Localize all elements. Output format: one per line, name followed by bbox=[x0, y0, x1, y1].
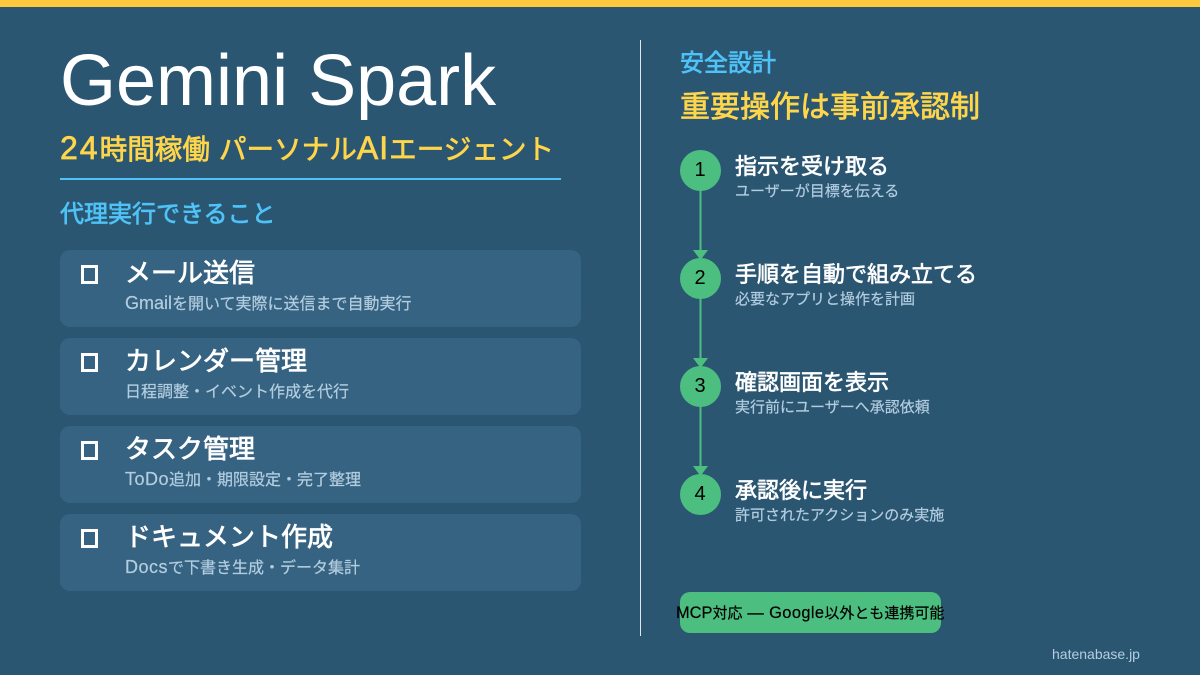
panel: tasks bbox=[60, 426, 581, 503]
icon: email bbox=[81, 265, 98, 284]
tasks heading: タスク管理 bbox=[125, 429, 255, 466]
section heading: prior approval: 重要操作は事前承認制 bbox=[680, 82, 980, 126]
icon: documents bbox=[81, 529, 98, 548]
step 3 number: 3 bbox=[694, 375, 706, 397]
panel: email bbox=[60, 250, 581, 327]
step 4 heading: 承認後に実行 bbox=[735, 473, 867, 505]
step 1 number: 1 bbox=[694, 159, 706, 181]
documents description: Docsで下書き生成・データ集計 bbox=[125, 554, 360, 578]
section label: safety design: 安全設計 bbox=[680, 43, 776, 78]
arrow: step 2 to 3 bbox=[693, 298, 708, 368]
step 1 heading: 指示を受け取る bbox=[735, 149, 889, 181]
MCP badge text: MCP対応 — Google以外とも連携可能 bbox=[676, 602, 944, 623]
icon: tasks bbox=[81, 441, 98, 460]
step 1 number bbox=[680, 150, 721, 191]
email description: Gmailを開いて実際に送信まで自動実行 bbox=[125, 290, 412, 314]
MCP badge bbox=[680, 592, 941, 633]
section heading: delegated tasks: 代理実行できること bbox=[60, 194, 276, 229]
step 3 heading: 確認画面を表示 bbox=[735, 365, 889, 397]
top accent bar bbox=[0, 0, 1200, 7]
step 4 description: 許可されたアクションのみ実施 bbox=[735, 504, 944, 525]
arrows between steps bbox=[693, 190, 708, 474]
documents heading: ドキュメント作成 bbox=[125, 517, 333, 554]
step 4 number bbox=[680, 474, 721, 515]
step 2 description: 必要なアプリと操作を計画 bbox=[735, 288, 915, 309]
subtitle: 24時間稼働 パーソナルAIエージェント bbox=[60, 127, 554, 167]
subtitle underline bbox=[60, 178, 561, 180]
tasks description: ToDo追加・期限設定・完了整理 bbox=[125, 466, 361, 490]
panel: calendar bbox=[60, 338, 581, 415]
arrow: step 1 to 2 bbox=[693, 190, 708, 260]
footer source: hatenabase.jp bbox=[1052, 646, 1140, 662]
step 2 number bbox=[680, 258, 721, 299]
panel: documents bbox=[60, 514, 581, 591]
step 4 number: 4 bbox=[694, 483, 706, 505]
step 3 description: 実行前にユーザーへ承認依頼 bbox=[735, 396, 930, 417]
step 2 heading: 手順を自動で組み立てる bbox=[735, 257, 977, 289]
step 1 description: ユーザーが目標を伝える bbox=[735, 180, 899, 201]
icon: calendar bbox=[81, 353, 98, 372]
column divider bbox=[640, 40, 641, 636]
title: Gemini Spark bbox=[60, 41, 496, 121]
calendar description: 日程調整・イベント作成を代行 bbox=[125, 378, 349, 402]
arrow: step 3 to 4 bbox=[693, 406, 708, 476]
calendar heading: カレンダー管理 bbox=[125, 341, 307, 378]
step 2 number: 2 bbox=[694, 267, 706, 289]
step 3 number bbox=[680, 366, 721, 407]
email heading: メール送信 bbox=[125, 253, 255, 290]
